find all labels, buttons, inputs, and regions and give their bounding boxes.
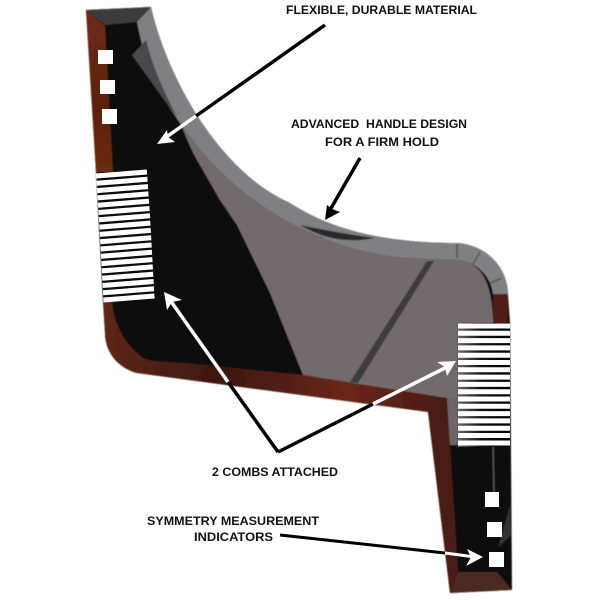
label: handle design: FOR A FIRM HOLD [325,135,439,149]
arrow: comb left [164,292,278,452]
bottom bevel [450,572,512,593]
beard shaper tool [86,7,512,593]
tool body silhouette [86,7,512,593]
label: symmetry indicators: INDICATORS [194,530,273,544]
comb: left teeth [96,172,154,300]
label: symmetry indicators [147,514,320,544]
label: handle design: ADVANCED HANDLE DESIGN [291,117,467,131]
label: flexible material: FLEXIBLE, DURABLE MATERIAL [286,3,477,17]
maroon bottom edge [103,300,447,412]
label: symmetry indicators: SYMMETRY MEASUREMENT [147,514,320,528]
symmetry squares: left [98,50,117,124]
thin line to squares [493,446,494,492]
arrow: flexible material [157,25,325,144]
top bevel [86,7,151,25]
light reflection lower right [498,505,511,548]
symmetry squares: right [485,492,504,567]
arrow: symmetry indicator [280,535,483,566]
label: combs: 2 COMBS ATTACHED [212,465,338,479]
maroon strip at right edge [493,294,508,323]
comb: right teeth [458,323,510,447]
corner bevel dividers [457,244,502,283]
curved outer grey bevel [137,7,508,295]
dark shadow on handle bevel [300,225,375,240]
grey wedge lower segment [447,398,458,445]
maroon left strip [86,10,113,172]
diagonal dark stripe [350,261,434,383]
dark shadow on bevel top [132,40,178,118]
arrow: handle design [325,158,360,220]
arrow: comb right [278,361,456,452]
label: handle design [291,117,467,149]
maroon lower right strip [428,398,458,593]
main grey handle area [180,123,493,443]
